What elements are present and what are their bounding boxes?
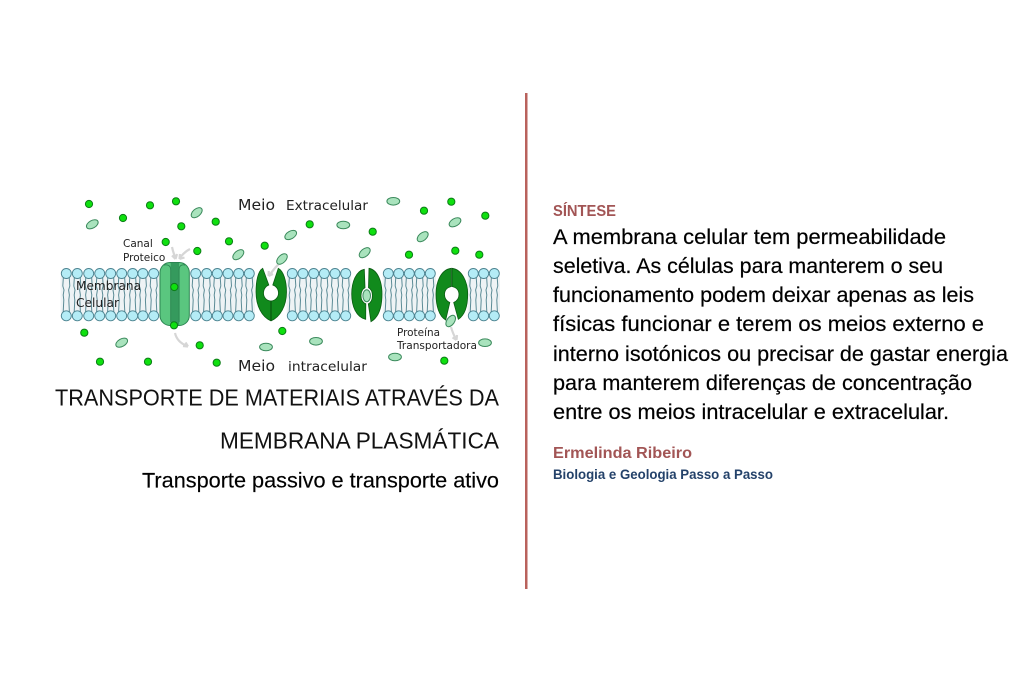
text block: synthesis: interno isotónicos ou precisar de gastar energia xyxy=(553,342,1008,366)
label: Meio Extracelular: Meio xyxy=(238,196,275,214)
label: Meio Extracelular: Extracelular xyxy=(286,198,368,214)
text block: synthesis: seletiva. As células para manterem o seu xyxy=(553,254,943,278)
blog name: Biologia e Geologia Passo a Passo xyxy=(553,466,773,482)
heading: SÍNTESE: SÍNTESE xyxy=(553,201,616,220)
label: Membrana Celular xyxy=(76,278,141,310)
author name: Ermelinda Ribeiro xyxy=(553,445,692,462)
text block: synthesis: para manterem diferenças de concentração xyxy=(553,371,972,395)
text block: synthesis xyxy=(553,225,1008,424)
label: Meio intracelular: Meio xyxy=(238,357,275,375)
arrows xyxy=(172,247,457,346)
label: Proteína Transportadora: Transportadora xyxy=(396,340,477,352)
subtitle: Transporte passivo e transporte ativo xyxy=(142,469,499,492)
label: Meio Extracelular xyxy=(238,196,368,214)
label: Meio intracelular: intracelular xyxy=(288,359,367,375)
diagram: cell membrane transport xyxy=(61,196,500,375)
divider line xyxy=(525,93,528,589)
title: MEMBRANA PLASMÁTICA xyxy=(220,428,500,454)
text block: synthesis: funcionamento podem deixar apenas as leis xyxy=(553,283,974,307)
icon: carrier protein open to inside xyxy=(436,268,468,320)
text block: synthesis: A membrana celular tem permeabilidade xyxy=(553,225,946,249)
lipid bilayer xyxy=(61,268,500,321)
label: Membrana Celular: Celular xyxy=(76,295,120,310)
pale molecules xyxy=(85,198,491,361)
title: TRANSPORTE DE MATERIAIS ATRAVÉS DA xyxy=(55,384,500,410)
label: Canal Proteico: Canal xyxy=(123,238,153,250)
icon: carrier protein open to outside xyxy=(256,268,286,321)
green molecules xyxy=(81,198,489,366)
icon: carrier protein occluded xyxy=(352,268,382,322)
label: Proteína Transportadora: Proteína xyxy=(397,327,440,339)
label: Canal Proteico: Proteico xyxy=(123,252,165,264)
text block: synthesis: físicas funcionar e terem os meios externo e xyxy=(553,312,984,336)
icon: channel protein xyxy=(160,262,189,326)
title xyxy=(55,384,500,454)
label: Meio intracelular xyxy=(238,357,367,375)
label: Proteína Transportadora xyxy=(396,327,477,352)
text block: synthesis: entre os meios intracelular e extracelular. xyxy=(553,400,949,424)
label: Membrana Celular: Membrana xyxy=(76,278,141,293)
